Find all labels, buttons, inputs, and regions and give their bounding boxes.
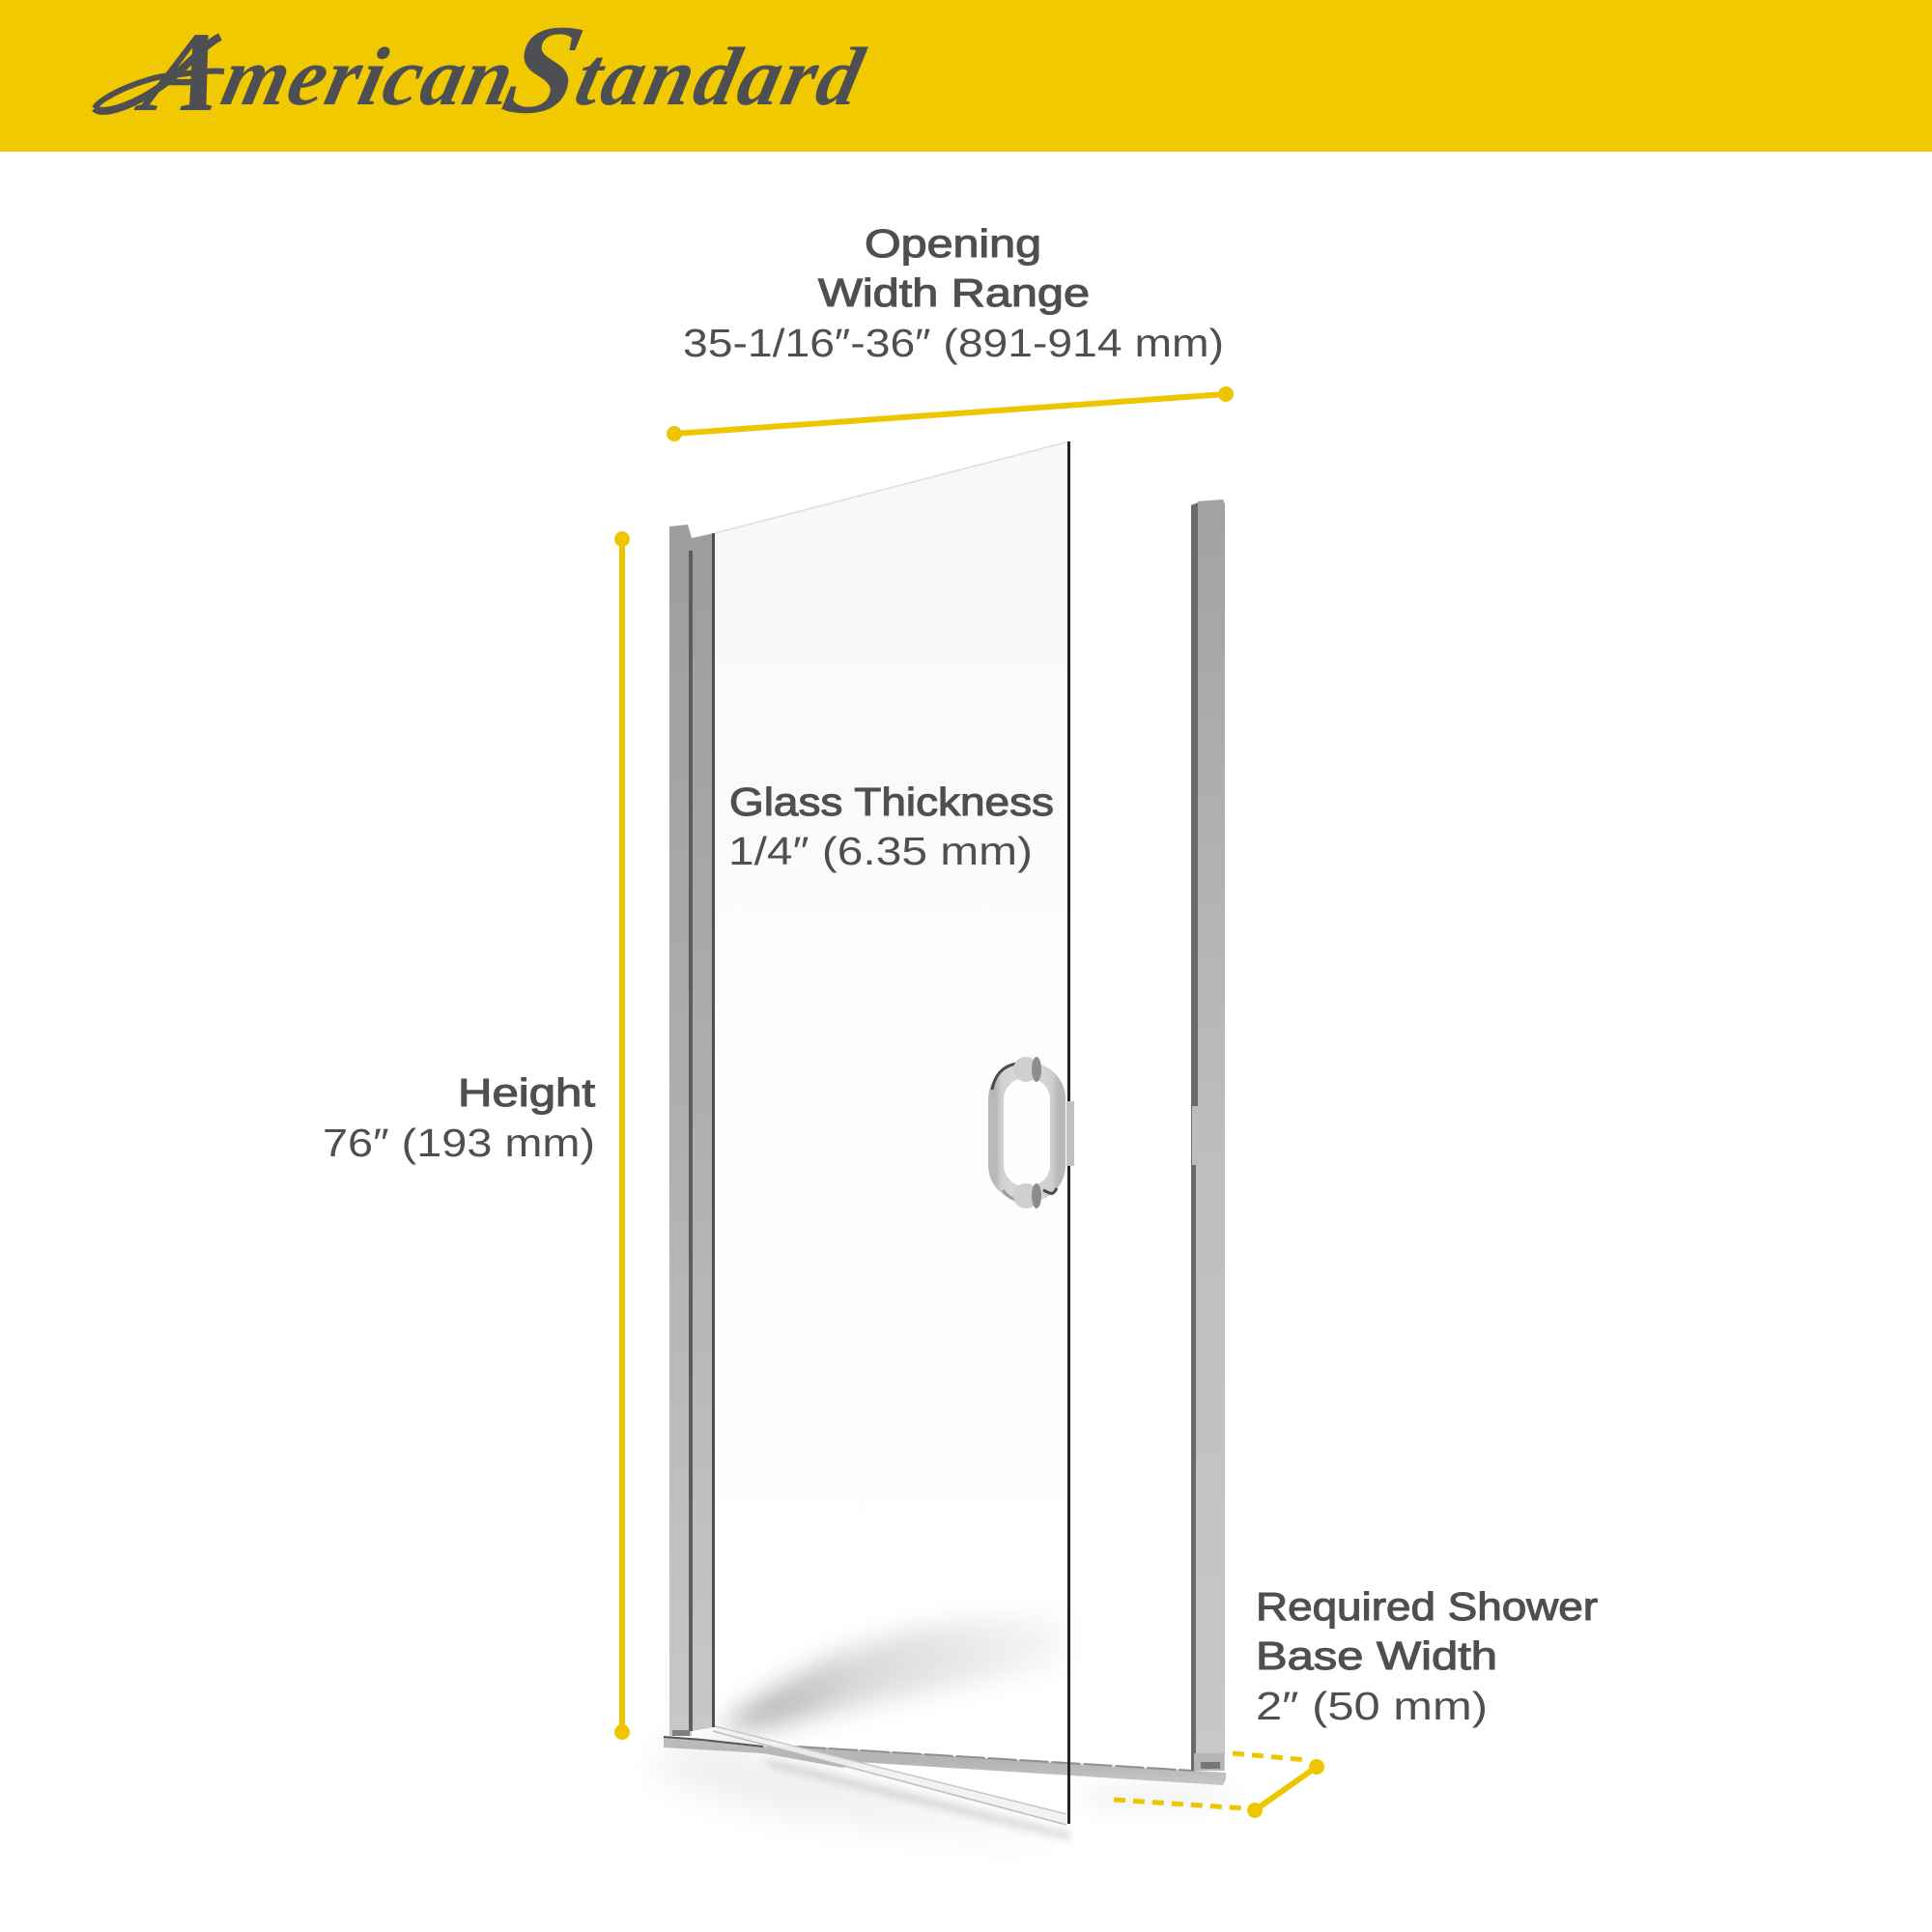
logo: American Standard: S — [493, 0, 596, 140]
dimension: height label: 76″ (193 mm) — [323, 1121, 595, 1165]
dimension: height line — [614, 531, 630, 1740]
header band — [0, 0, 1932, 152]
logo: American Standard — [95, 0, 881, 140]
dimension: height label — [323, 1070, 596, 1165]
glass bottom edge — [713, 1726, 1066, 1825]
base width label: Base Width — [1256, 1634, 1497, 1678]
glass thickness edge — [1067, 441, 1070, 1824]
left wall frame — [669, 525, 715, 1736]
handle bracket — [1066, 1101, 1074, 1166]
base track — [664, 1737, 1226, 1785]
shower door glass panel — [715, 441, 1069, 1824]
ground shadow — [657, 1744, 1236, 1841]
dimension: opening width label: 35-1/16″-36″ (891-914 mm) — [683, 321, 1224, 365]
base width dimension — [1114, 1753, 1324, 1818]
right wall frame — [1191, 499, 1225, 1771]
dimension: height label: Height — [458, 1070, 596, 1115]
glass thickness label: Glass Thickness — [729, 780, 1054, 824]
door handle — [992, 1057, 1058, 1208]
glass thickness label: 1/4″ (6.35 mm) — [728, 829, 1033, 873]
dimension: opening width label — [683, 221, 1224, 365]
base width label: Required Shower — [1256, 1584, 1598, 1629]
base width label — [1256, 1584, 1598, 1728]
dimension: opening width line — [667, 386, 1234, 441]
glass thickness label — [728, 780, 1054, 873]
logo: American Standard: tandard — [568, 30, 873, 123]
logo: American Standard: merican — [214, 30, 524, 123]
dimension: opening width label: Width Range — [818, 270, 1090, 315]
base width label: 2″ (50 mm) — [1256, 1684, 1488, 1728]
logo: American Standard: A — [128, 8, 240, 135]
dimension: opening width label: Opening — [865, 221, 1041, 266]
